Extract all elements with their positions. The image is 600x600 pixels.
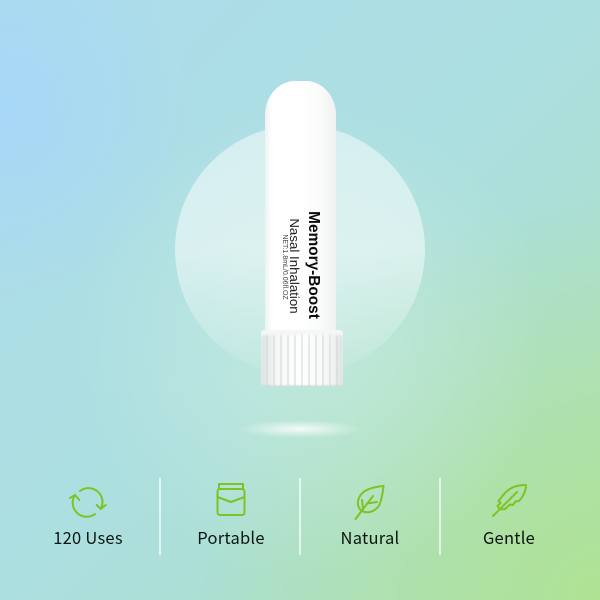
backdrop circle — [175, 125, 425, 375]
label: Portable — [197, 525, 265, 549]
label: 120 Uses — [53, 525, 123, 549]
icon: feather — [492, 484, 527, 517]
label: net weight: NET:1.8mL/0.06fl.OZ — [281, 234, 288, 300]
feature: Gentle — [483, 484, 535, 549]
label: Gentle — [483, 525, 535, 549]
divider — [159, 478, 161, 555]
icon: leaf — [354, 485, 384, 520]
divider — [439, 478, 441, 555]
label: Nasal Inhalation: Nasal Inhalation — [287, 218, 302, 314]
cap — [261, 330, 343, 386]
icon: cycle arrows — [69, 487, 107, 518]
feature: 120 Uses — [53, 487, 123, 549]
floor glow — [238, 414, 362, 444]
inhaler product — [261, 81, 343, 386]
label: Natural — [341, 525, 399, 549]
tube body — [265, 81, 336, 336]
icon: pouch — [216, 483, 246, 516]
feature: Portable — [197, 483, 265, 549]
label: Memory-Boost: Memory-Boost — [305, 211, 322, 319]
divider — [299, 478, 301, 555]
feature: Natural — [341, 485, 399, 549]
